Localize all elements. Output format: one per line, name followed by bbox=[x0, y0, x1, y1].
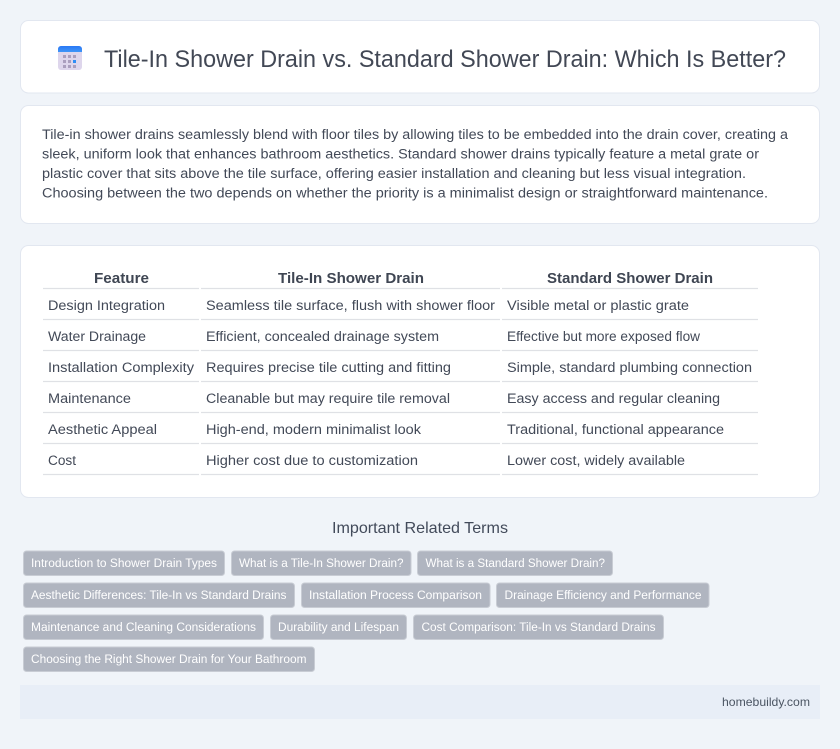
row: design integration: Design Integration bbox=[48, 298, 165, 314]
tag: Drainage Efficiency and Performance bbox=[504, 588, 702, 602]
title: Tile-In Shower Drain vs. Standard Shower Drain: Which Is Better? bbox=[104, 46, 786, 73]
footer bbox=[20, 685, 820, 719]
table header: Feature bbox=[94, 270, 149, 287]
tag bbox=[24, 551, 224, 576]
text block: introduction: Choosing between the two depends on whether the priority is a minimalist design or straightforward maintenance. bbox=[42, 186, 768, 202]
tag: Introduction to Shower Drain Types bbox=[31, 556, 217, 570]
table header: Tile-In Shower Drain bbox=[278, 270, 424, 287]
panel: header bbox=[20, 20, 820, 93]
text block: introduction bbox=[42, 127, 788, 202]
tag: What is a Standard Shower Drain? bbox=[426, 556, 605, 570]
row: cost bbox=[48, 453, 685, 469]
tag: What is a Tile-In Shower Drain? bbox=[239, 556, 404, 570]
footer text: homebuildy.com bbox=[722, 695, 810, 709]
row: aesthetic appeal: Traditional, functional appearance bbox=[507, 422, 724, 438]
row: water drainage: Effective but more exposed flow bbox=[507, 329, 701, 345]
row: maintenance: Cleanable but may require tile removal bbox=[206, 391, 450, 407]
tag bbox=[24, 615, 264, 640]
tag: Aesthetic Differences: Tile-In vs Standard Drains bbox=[31, 588, 286, 602]
row: installation complexity: Simple, standard plumbing connection bbox=[507, 360, 752, 376]
tag bbox=[496, 583, 709, 608]
tag bbox=[270, 615, 406, 640]
tag: Cost Comparison: Tile-In vs Standard Drains bbox=[422, 620, 656, 634]
icon: calendar bbox=[58, 46, 82, 70]
tag bbox=[418, 551, 612, 576]
row: cost: Cost bbox=[48, 453, 76, 469]
row: aesthetic appeal: High-end, modern minimalist look bbox=[206, 422, 422, 438]
tag: Maintenance and Cleaning Considerations bbox=[31, 620, 256, 634]
row: design integration: Seamless tile surface, flush with shower floor bbox=[206, 298, 495, 314]
panel: introduction bbox=[20, 106, 820, 224]
row: maintenance: Easy access and regular cleaning bbox=[507, 391, 720, 407]
row: cost: Higher cost due to customization bbox=[206, 453, 418, 469]
row: installation complexity bbox=[48, 360, 752, 376]
text block: introduction: Tile-in shower drains seamlessly blend with floor tiles by allowing tiles to be embedded into the drain cover, creating a bbox=[42, 127, 788, 143]
row: aesthetic appeal bbox=[48, 422, 724, 438]
heading: important related terms: Important Related Terms bbox=[332, 520, 508, 537]
row: installation complexity: Installation Complexity bbox=[48, 360, 195, 376]
tag: Durability and Lifespan bbox=[278, 620, 399, 634]
table header: Standard Shower Drain bbox=[547, 270, 713, 287]
row: maintenance: Maintenance bbox=[48, 391, 131, 407]
tag: Choosing the Right Shower Drain for Your Bathroom bbox=[31, 652, 306, 666]
tag bbox=[24, 647, 314, 672]
row: design integration bbox=[48, 298, 689, 314]
text block: introduction: sleek, uniform look that enhances bathroom aesthetics. Standard shower drains typically feature a metal grate or bbox=[42, 146, 759, 162]
row: installation complexity: Requires precise tile cutting and fitting bbox=[206, 360, 451, 376]
tag bbox=[24, 583, 294, 608]
row: water drainage bbox=[48, 329, 701, 345]
tag bbox=[302, 583, 490, 608]
row: maintenance bbox=[48, 391, 720, 407]
tags: related terms bbox=[24, 551, 709, 672]
tag bbox=[232, 551, 411, 576]
row: aesthetic appeal: Aesthetic Appeal bbox=[48, 422, 157, 438]
table header bbox=[94, 270, 713, 287]
row: water drainage: Water Drainage bbox=[48, 329, 146, 345]
row: design integration: Visible metal or plastic grate bbox=[507, 298, 689, 314]
row: water drainage: Efficient, concealed drainage system bbox=[206, 329, 439, 345]
panel: comparison table bbox=[20, 246, 820, 498]
tag: Installation Process Comparison bbox=[309, 588, 482, 602]
tag bbox=[414, 615, 664, 640]
text block: introduction: plastic cover that sits above the tile surface, offering easier installation and cleaning but less visual integration. bbox=[42, 166, 746, 182]
row: cost: Lower cost, widely available bbox=[507, 453, 685, 469]
